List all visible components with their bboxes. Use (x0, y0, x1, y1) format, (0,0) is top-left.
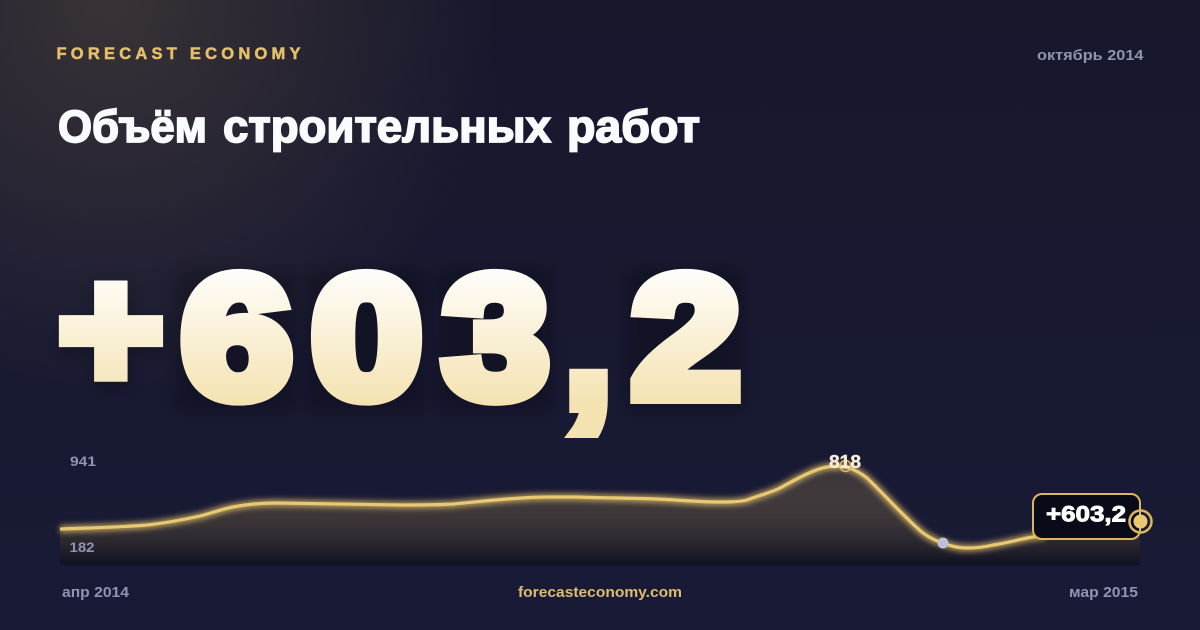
headline number: 6 (182, 242, 292, 434)
source link: forecasteconomy.com (518, 584, 682, 601)
curve line (60, 466, 1045, 548)
area under curve (60, 466, 1140, 565)
headline number: 2 (632, 241, 740, 433)
max marker (840, 460, 851, 472)
value callout (1033, 494, 1140, 539)
sparkline chart (60, 452, 1152, 565)
value callout: +603,2 (1046, 502, 1126, 526)
start date label: апр 2014 (62, 584, 130, 601)
title: строительных (223, 101, 551, 152)
brand label: FORECAST ECONOMY (56, 45, 300, 63)
date label: октябрь 2014 (1037, 47, 1144, 64)
headline number: 3 (443, 241, 549, 434)
axis min label: 182 (70, 539, 95, 555)
min marker (938, 538, 948, 548)
headline number: + (58, 231, 164, 426)
end marker (1130, 510, 1152, 532)
headline number: 0 (312, 242, 422, 434)
axis max label: 941 (70, 453, 96, 469)
title: Объём (58, 101, 207, 152)
title: работ (567, 101, 700, 152)
end date label: мар 2015 (1069, 584, 1138, 601)
headline number shadow (60, 270, 742, 412)
max label: 818 (829, 452, 861, 472)
headline number: , (564, 234, 612, 446)
curve glow (60, 466, 1045, 548)
headline number (58, 268, 741, 438)
